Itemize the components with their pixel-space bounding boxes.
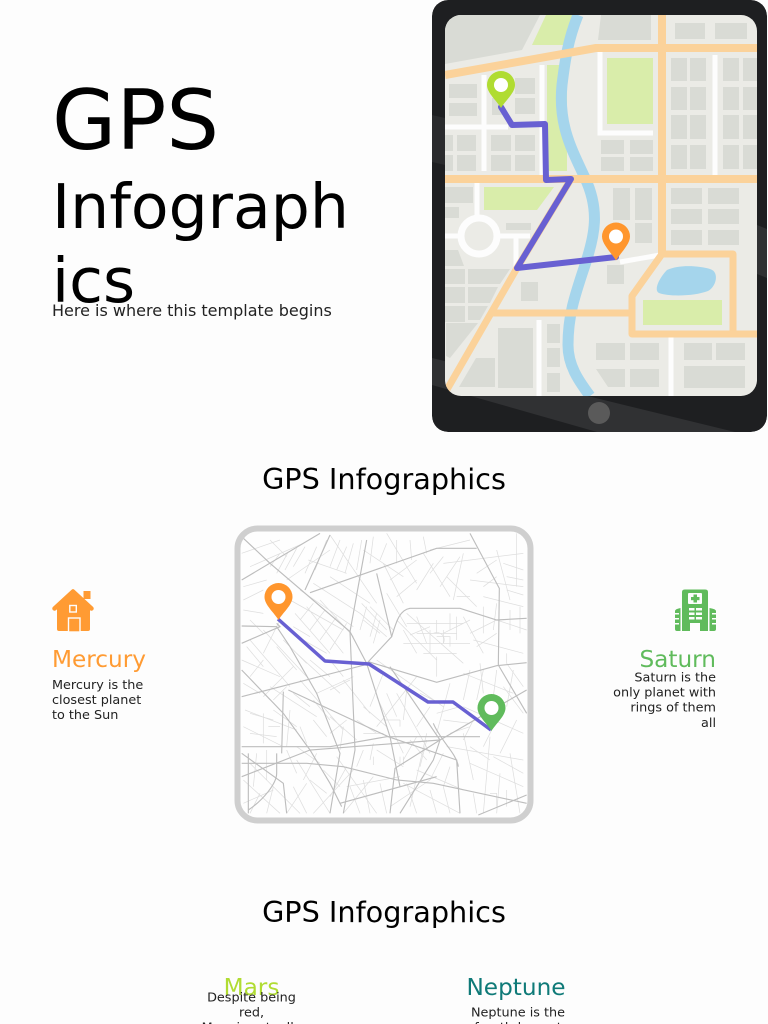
description [202,990,302,1024]
major streets [242,533,527,815]
description: to the Sun [52,708,118,723]
icon: hospital [675,590,716,631]
title [52,72,349,317]
panel: Mars [202,974,302,1024]
pin: orange [602,222,630,260]
description [613,670,716,731]
river [561,15,594,396]
pin: lime [487,71,515,108]
panel: Saturn [613,590,716,731]
subtitle: Here is where this template begins [52,301,332,320]
orange roads [445,15,757,393]
tablet illustration [432,0,767,432]
description: Neptune is the [471,1006,565,1020]
tablet body [432,0,767,432]
description: Despite being [207,990,296,1006]
parks [484,15,722,325]
street map panel [238,528,530,820]
panel: Neptune [466,974,566,1024]
street network [242,533,527,815]
description: red, [239,1006,264,1020]
city blocks [445,15,757,392]
title: ics [52,245,135,317]
description: all [701,716,716,731]
description: rings of them [630,700,716,716]
pin: green end [478,694,506,731]
label: Mercury [52,646,146,673]
pin: orange start [264,583,292,620]
label: Saturn [639,646,716,673]
description: only planet with [613,686,716,700]
map frame [238,528,530,820]
icon: house [54,590,92,632]
white side streets [445,52,715,396]
panel: Mercury [52,590,146,723]
pond [657,266,716,295]
description: Saturn is the [634,670,716,686]
tablet screen map [445,15,757,396]
route line [278,619,491,730]
label: Neptune [466,974,566,1001]
label: Mars [224,974,279,1001]
dense neighbourhood grids [270,537,427,573]
title: Infograph [52,171,349,243]
route line [501,107,616,268]
minor streets [242,533,527,813]
description: Mercury is the [52,678,143,693]
description [52,678,143,723]
title: GPS [52,72,219,169]
heading: section two: GPS Infographics [262,895,506,929]
description: closest planet [52,693,141,708]
heading: section one: GPS Infographics [262,462,506,496]
